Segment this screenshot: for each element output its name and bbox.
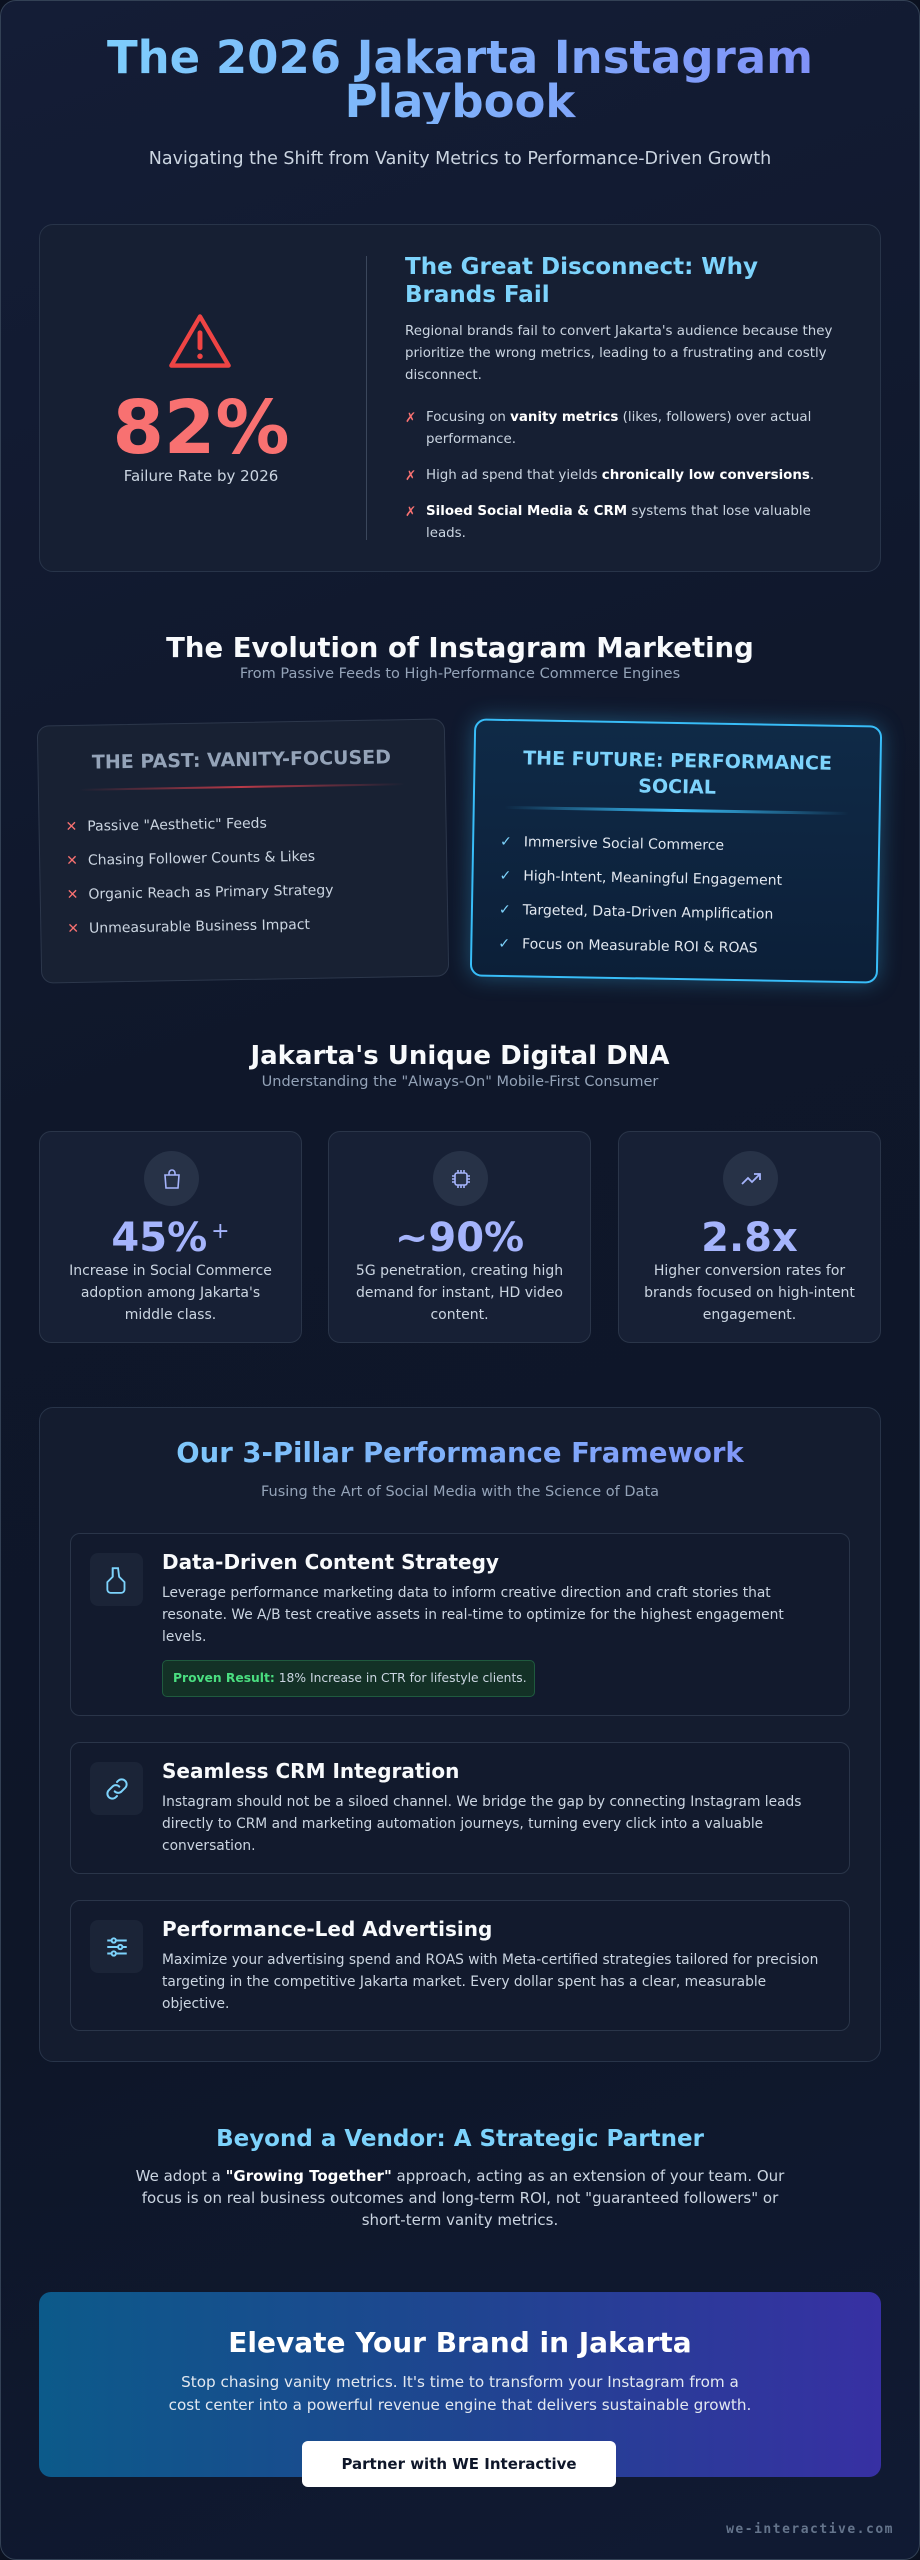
panel: 3-pillar framework xyxy=(39,1407,881,2062)
list: failures: Focusing on vanity metrics (likes, followers) over actual performance. xyxy=(426,410,811,447)
pillar card: CRM: Instagram should not be a siloed channel. We bridge the gap by connecting Instagram leads directly to CRM and marketing automation journeys, turning every click into a valuable conversation. xyxy=(162,1794,802,1854)
icon: trend xyxy=(723,1151,778,1206)
list: future xyxy=(498,834,782,956)
subheading: digital DNA: Understanding the "Always-On" Mobile-First Consumer xyxy=(262,1074,658,1090)
list: past: ✕ Organic Reach as Primary Strategy xyxy=(67,882,334,903)
title: The 2026 Jakarta Instagram xyxy=(107,31,813,84)
list: future: ✓ Immersive Social Commerce xyxy=(500,834,724,854)
stat card: 45%: Increase in Social Commerce adoption among Jakarta's middle class. xyxy=(69,1263,272,1323)
list: failures: ✗ xyxy=(405,505,416,520)
pillar card: advertising xyxy=(70,1900,850,2031)
subtitle: Navigating the Shift from Vanity Metrics to Performance-Driven Growth xyxy=(149,149,771,169)
list: past: ✕ Chasing Follower Counts & Likes xyxy=(66,849,315,869)
stat card: 2.8x xyxy=(618,1131,881,1343)
heading: evolution: The Evolution of Instagram Marketing xyxy=(166,632,754,664)
list: future: ✓ Focus on Measurable ROI & ROAS xyxy=(498,936,758,956)
text: CTA: Stop chasing vanity metrics. It's time to transform your Instagram from a xyxy=(181,2373,739,2391)
button: partner xyxy=(302,2441,616,2487)
panel: future xyxy=(470,718,882,984)
subheading: evolution: From Passive Feeds to High-Performance Commerce Engines xyxy=(240,666,680,682)
text: intro: Regional brands fail to convert Jakarta's audience because they prioritize the wrong metrics, leading to a frustrating and costly disconnect. xyxy=(405,324,832,383)
heading: digital DNA: Jakarta's Unique Digital DNA xyxy=(250,1041,670,1071)
list: past: ✕ Unmeasurable Business Impact xyxy=(67,917,310,937)
pillar card: content strategy: Leverage performance marketing data to inform creative direction and craft stories that resonate. We A/B test creative assets in real-time to optimize for the highest engagement levels. xyxy=(162,1585,784,1645)
pillar card: CRM: Seamless CRM Integration xyxy=(162,1759,459,1783)
list: failures: Siloed Social Media & CRM systems that lose valuable leads. xyxy=(426,504,811,541)
stat card: 2.8x: Higher conversion rates for brands focused on high-intent engagement. xyxy=(644,1263,855,1323)
text: strategic partner: focus is on real business outcomes and long-term ROI, not "guaranteed followers" or short-term vanity metrics. xyxy=(142,2189,778,2229)
callout: proven result xyxy=(162,1660,535,1697)
list: future: ✓ Targeted, Data-Driven Amplification xyxy=(499,902,773,923)
stat card: 45% xyxy=(39,1131,302,1343)
heading: future: THE FUTURE: PERFORMANCE SOCIAL xyxy=(523,747,832,799)
heading: framework xyxy=(40,1437,880,1469)
stat label: Failure Rate by 2026 xyxy=(124,467,278,485)
list: future: ✓ High-Intent, Meaningful Engagement xyxy=(499,868,782,889)
text: CTA: cost center into a powerful revenue engine that delivers sustainable growth. xyxy=(169,2396,751,2414)
heading: CTA: Elevate Your Brand in Jakarta xyxy=(228,2326,692,2359)
list: failures: ✗ xyxy=(405,411,416,426)
text: CTA xyxy=(169,2373,751,2414)
stat card: 90%: ~90% xyxy=(395,1215,524,1261)
heading: strategic partner: Beyond a Vendor: A Strategic Partner xyxy=(216,2126,704,2152)
pillar card: advertising: Maximize your advertising spend and ROAS with Meta-certified strategies tailored for precision targeting in the competitive Jakarta market. Every dollar spent has a clear, measurable objective. xyxy=(162,1952,818,2012)
stat card: 90% xyxy=(328,1131,591,1343)
button: partner: Partner with WE Interactive xyxy=(341,2455,577,2473)
stat card: 90%: 5G penetration, creating high demand for instant, HD video content. xyxy=(356,1263,563,1323)
icon: link xyxy=(90,1762,143,1815)
list: past: ✕ Passive "Aesthetic" Feeds xyxy=(65,816,267,835)
icon: warning xyxy=(169,314,231,368)
text: strategic partner xyxy=(136,2167,784,2229)
stat card: 2.8x: 2.8x xyxy=(701,1215,798,1261)
heading: past: THE PAST: VANITY-FOCUSED xyxy=(92,746,391,774)
pillar card: content strategy: Data-Driven Content Strategy xyxy=(162,1550,499,1574)
panel: CTA xyxy=(39,2292,881,2477)
pillar card: CRM xyxy=(70,1742,850,1874)
title: Playbook xyxy=(345,75,575,128)
list: failures: ✗ xyxy=(405,469,416,484)
title xyxy=(40,36,880,124)
list: failures: High ad spend that yields chronically low conversions. xyxy=(426,468,814,483)
subheading: framework: Fusing the Art of Social Media with the Science of Data xyxy=(261,1484,659,1500)
text: strategic partner: We adopt a "Growing Together" approach, acting as an extension of your team. Our xyxy=(136,2167,784,2185)
list: past xyxy=(65,816,334,937)
icon: sliders xyxy=(90,1920,143,1973)
callout: proven result: Proven Result: 18% Increase in CTR for lifestyle clients. xyxy=(173,1671,527,1685)
list: failures xyxy=(405,410,814,541)
icon: chip xyxy=(433,1151,488,1206)
icon: shopping bag xyxy=(144,1151,199,1206)
panel: great disconnect xyxy=(39,224,881,572)
footer: url: we-interactive.com xyxy=(726,2522,894,2537)
stat card: 45%: 45%+ xyxy=(111,1215,230,1261)
stat: 82%: 82% xyxy=(112,385,290,471)
heading: framework: Our 3-Pillar Performance Framework xyxy=(176,1437,744,1469)
heading: great disconnect: The Great Disconnect: Why Brands Fail xyxy=(405,254,758,308)
panel: past xyxy=(37,718,449,984)
pillar card: advertising: Performance-Led Advertising xyxy=(162,1917,492,1941)
pillar card: content strategy xyxy=(70,1533,850,1716)
icon: flask xyxy=(90,1553,143,1606)
